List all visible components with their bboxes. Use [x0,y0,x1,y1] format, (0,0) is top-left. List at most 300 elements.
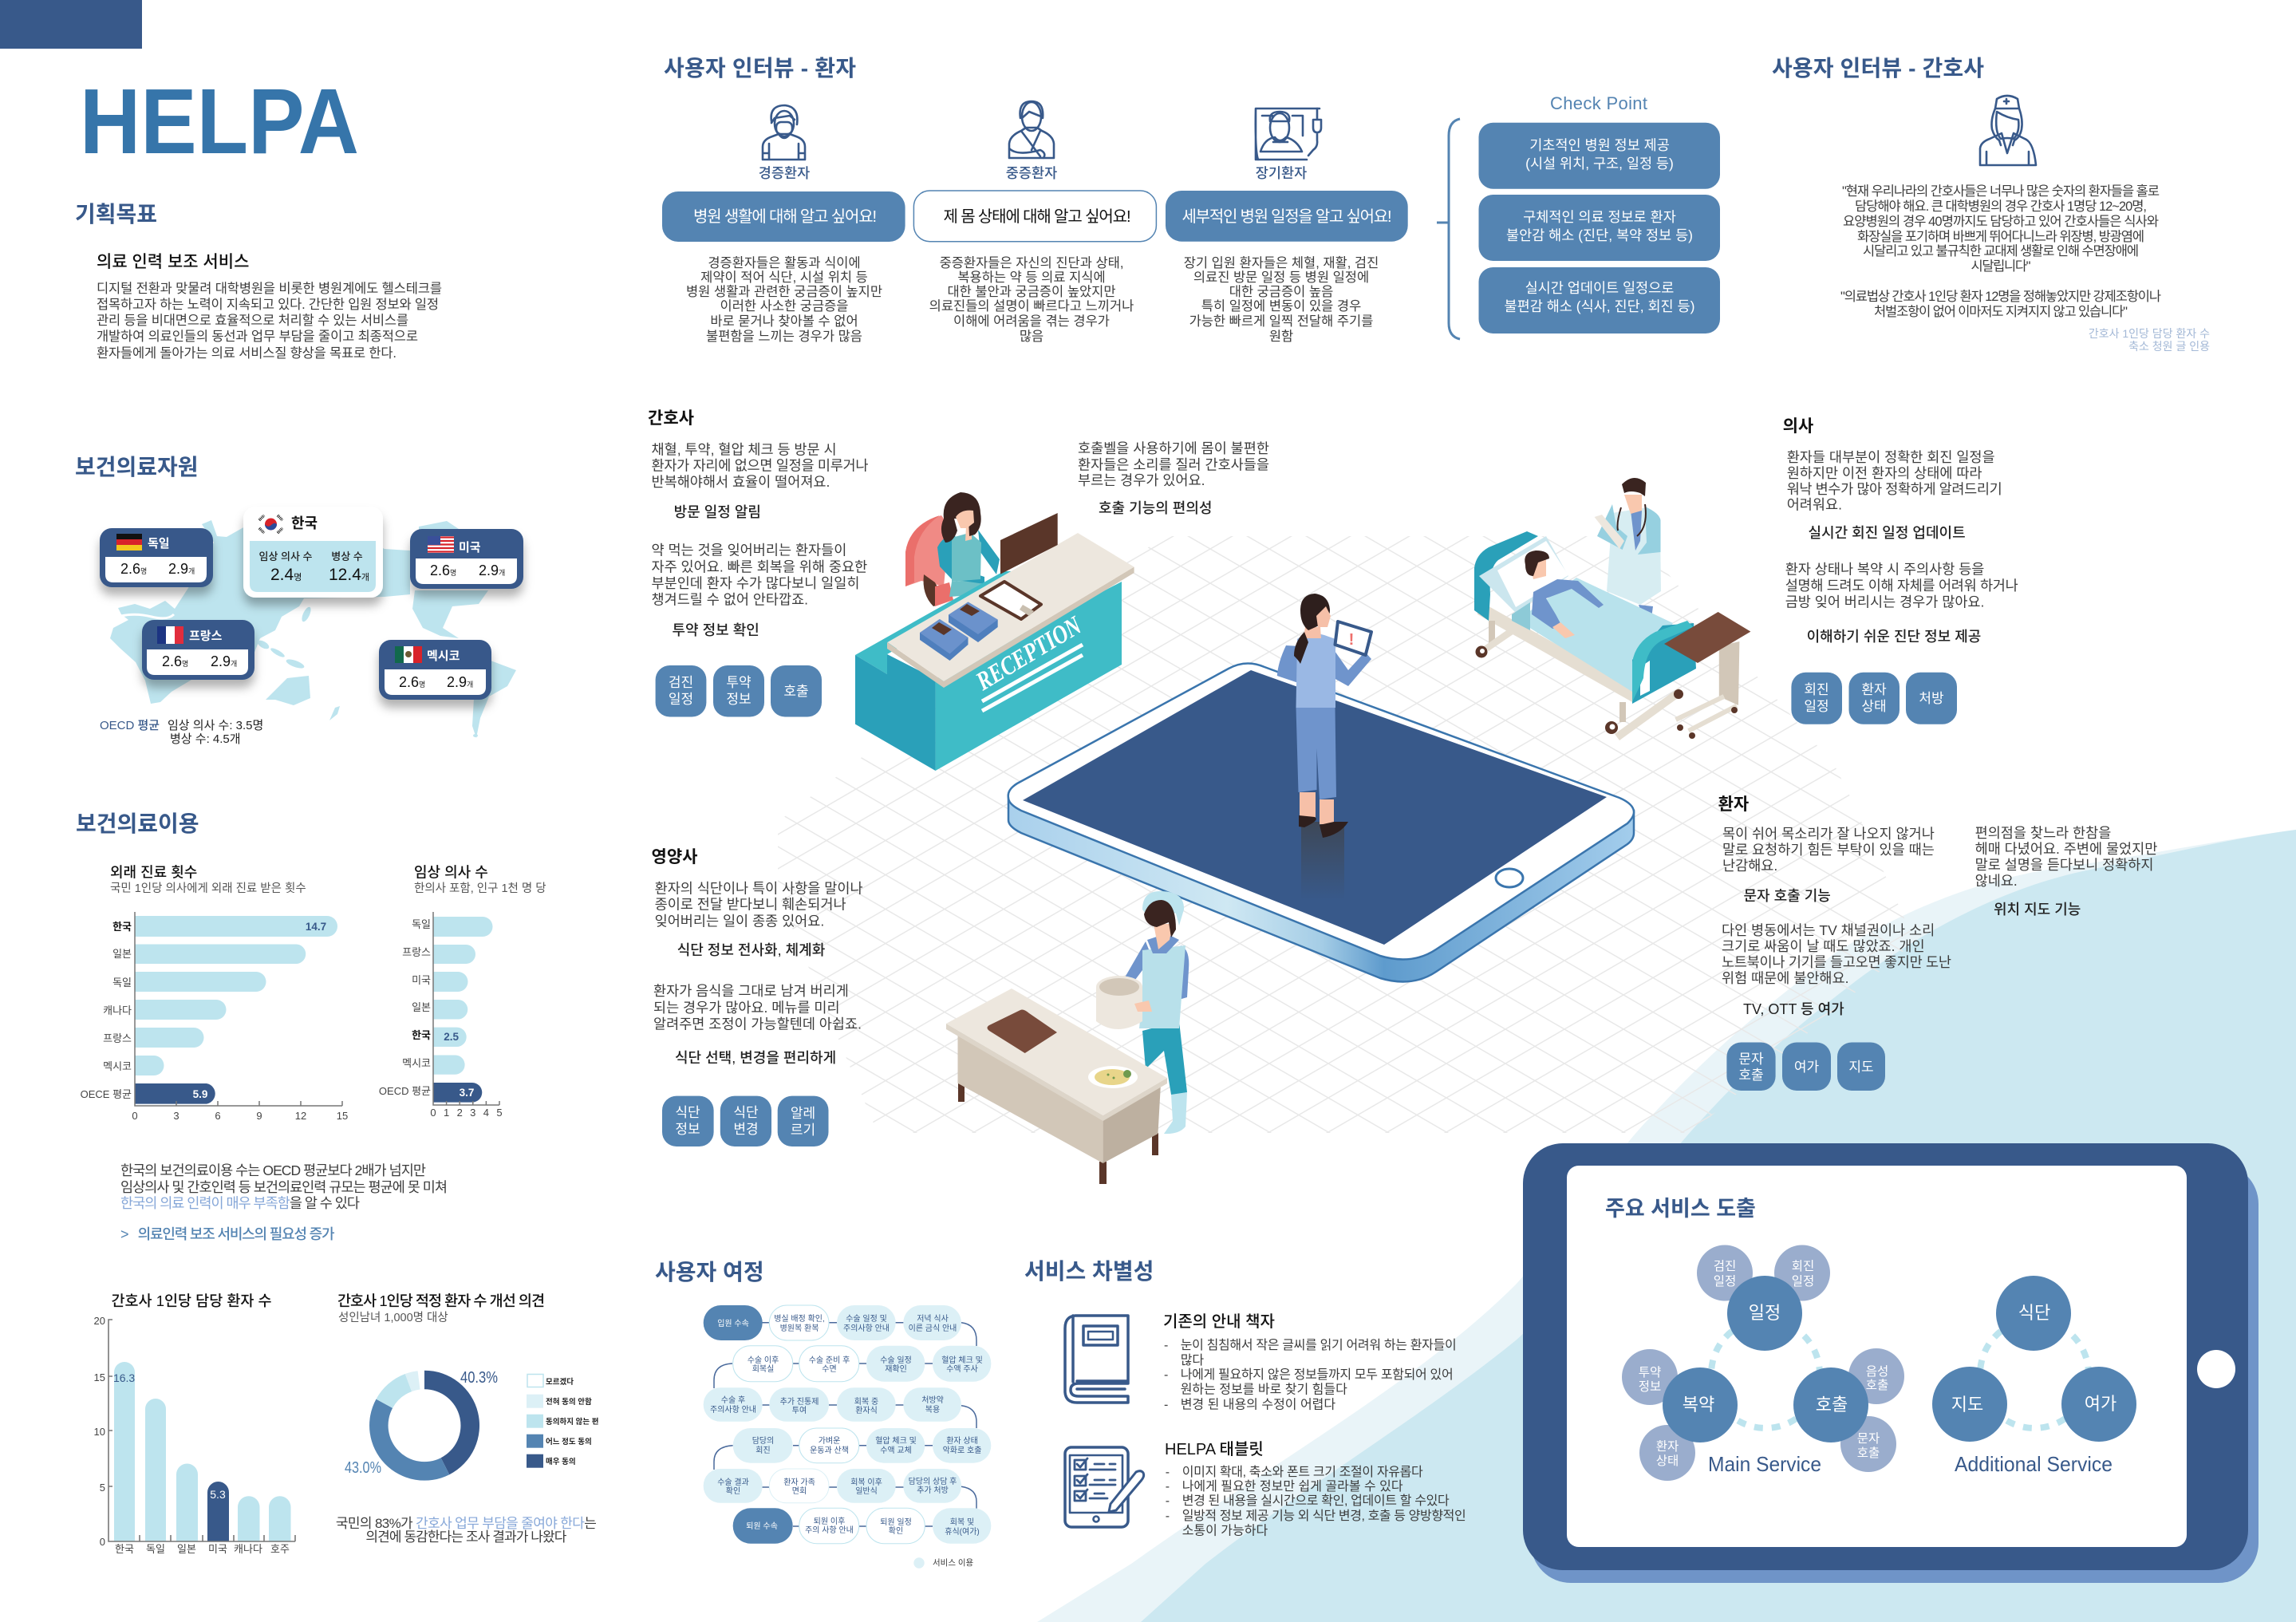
heading: nurse interview: 사용자 인터뷰 - 간호사 [1772,56,1984,81]
bar chart: outpatient visits: 15 [337,1110,348,1122]
text: severe patient: 대한 불안과 궁금증이 높았지만 [947,284,1116,299]
card: Germany: 2.9개 [168,561,195,577]
doctor [1607,507,1661,605]
bar chart: clinical doctors: 1 [444,1107,449,1119]
panel: healthcare utilisation [76,811,546,1242]
text: existing booklet: - [1164,1368,1168,1382]
doctor need 2: 금방 잊어 버리시는 경우가 많아요. [1785,594,1984,610]
patient need 2: 위험 때문에 불안해요. [1722,970,1849,986]
doctor need 1: 어려워요. [1787,496,1842,512]
dietitian need 2: 식단 선택, 변경을 편리하게 [675,1050,836,1066]
text: HELPA tablet: - [1166,1480,1170,1494]
top corner tab [0,0,142,49]
bar chart: patients per nurse: 15 [94,1371,105,1383]
bar chart: clinical doctors: 한의사 포함, 인구 1천 명 당 [414,882,546,895]
patient need 1 [1722,826,1935,904]
footboard [1632,623,1696,704]
nurse need 3 [1078,440,1269,516]
card: Germany: 독일 [148,537,170,551]
panel: user interview patient [662,56,1408,344]
donut chart: opinion on nurse patient ratio: 국민의 83%가 간호사 업무 부담을 줄여야 한다는 [336,1516,597,1531]
journey row 1: 병실 배정 확인, [774,1314,825,1324]
text: severe patient: 많음 [1020,329,1043,344]
table legs [958,1081,1158,1184]
bar chart: outpatient visits: 일본 [112,948,132,960]
bar chart: patients per nurse: 10 [94,1426,105,1438]
arms [1277,645,1300,683]
main service cluster: 호출 [1857,1446,1880,1460]
bar chart: patients per nurse: 0 [100,1536,105,1548]
bar chart: clinical doctors: 미국 [412,974,431,986]
books [949,602,998,642]
dietitian need 1: 종이로 전달 받다보니 훼손되거나 [655,897,846,913]
main service cluster: 검진 [1714,1259,1736,1273]
citation: 축소 청원 글 인용 [2128,340,2210,353]
journey row 4: 가벼운 [819,1436,840,1446]
journey row 4: 혈압 체크 및 [875,1435,917,1446]
journey row 2 [733,1346,991,1382]
journey legend [913,1557,974,1569]
desk sign: RECEPTION [971,611,1087,697]
text: severe patient: 복용하는 약 등 의료 지식에 [957,270,1106,285]
panel: check point [1437,93,1720,339]
illustration: dietitian with table [946,891,1189,1184]
journey row 5: 일반식 [855,1486,878,1496]
journey row 4: 회진 [755,1446,771,1455]
donut chart: opinion on nurse patient ratio: 어느 정도 동의 [546,1438,592,1446]
journey row 2: 재확인 [885,1364,907,1374]
journey row 5: 환자 가족 [783,1478,815,1487]
text: HELPA tablet [1165,1440,1466,1538]
button: hospital life [662,191,905,242]
journey row 6: 확인 [889,1526,903,1536]
button: my condition: 제 몸 상태에 대해 알고 싶어요! [943,207,1131,226]
journey row 3: 회복 중 [854,1397,878,1407]
journey row 2: 수술 이후 [748,1356,779,1365]
dietitian need 1: 환자의 식단이나 특이 사항을 말이나 [655,881,863,897]
main service cluster: 호출 [1866,1378,1888,1392]
bar chart: clinical doctors: 일본 [412,1001,431,1013]
doctor feature buttons: 회진 [1804,682,1829,697]
bar chart: clinical doctors: 프랑스 [402,946,431,958]
check box 3: 실시간 업데이트 일정으로 [1525,280,1674,296]
doctor need 1: 환자들 대부분이 정확한 회진 일정을 [1787,449,1995,465]
text: nurse quotes: 처벌조항이 없어 이마저도 지켜지지 않고 있습니다" [1874,304,2128,319]
main service cluster: 호출 [1816,1395,1848,1415]
donut chart: opinion on nurse patient ratio: 성인남녀 1,000명 대상 [338,1311,448,1324]
bed base [1477,600,1632,702]
panel: healthcare resources [75,455,523,746]
heading: healthcare resources: 보건의료자원 [75,455,199,479]
nurse need 2: 부분인데 환자 수가 많다보니 일일히 [651,575,859,591]
bar chart: patients per nurse [94,1292,295,1555]
text: long-term patient: 가능한 빠르게 일찍 전달해 주기를 [1189,314,1373,329]
bar chart: outpatient visits: 국민 1인당 의사에게 외래 진료 받은 횟수 [110,882,306,895]
text: long-term patient: 장기 입원 환자들은 체혈, 재활, 검진 [1184,255,1379,270]
text: existing booklet: - [1164,1339,1168,1352]
text block: finding: 한국의 의료 인력이 매우 부족함을 알 수 있다 [120,1195,360,1211]
dietitian need 1: 잊어버리는 일이 종종 있어요. [655,913,824,929]
journey row 5: 추가 처방 [917,1486,949,1495]
patient need 3: 헤매 다녔어요. 주변에 물었지만 [1975,841,2157,857]
heading: key services: 주요 서비스 도출 [1605,1197,1756,1221]
bar chart: clinical doctors [379,865,546,1119]
citation: 간호사 1인당 담당 환자 수 [2089,327,2210,340]
bar chart: outpatient visits: 14.7 [306,921,326,933]
desk sign [971,611,1087,711]
doctor feature buttons: 처방 [1919,691,1944,706]
paragraph: 개발하여 의료인들의 동선과 업무 부담을 줄이고 최종적으로 [97,329,418,344]
card: Korea: 임상 의사 수 [258,551,313,562]
bar chart: outpatient visits: 3 [173,1110,179,1122]
button: my condition [913,191,1156,242]
tablet home button [2197,1350,2235,1388]
journey row 6: 주의 사항 안내 [805,1525,854,1535]
label: severe patient: 중증환자 [1006,165,1057,181]
journey row 3 [704,1387,961,1422]
journey row 6: 휴식(여가) [945,1527,980,1537]
check box 1: (시설 위치, 구조, 일정 등) [1525,156,1674,172]
doctor feature buttons: 환자 [1861,682,1887,697]
bar chart: clinical doctors: 3.7 [460,1087,474,1099]
plate [1088,1066,1138,1088]
tablet screen [1567,1166,2187,1547]
dietitian need 2: 알려주면 조정이 가능할텐데 아쉽죠. [653,1016,862,1032]
bar chart: outpatient visits: 캐나다 [103,1004,132,1016]
icon: long-term patient [1256,109,1321,160]
journey row 3: 환자식 [855,1406,878,1415]
card: USA: 2.6명 [430,562,456,578]
doctor need 2 [1785,562,2018,645]
text block: finding: 한국의 보건의료이용 수는 OECD 평균보다 2배가 넘지만 [120,1162,426,1178]
doctor feature buttons: 일정 [1804,699,1829,714]
patient feature buttons [1726,1042,1885,1091]
nurse feature buttons: 정보 [726,692,752,707]
donut chart: opinion on nurse patient ratio: 모르겠다 [546,1377,574,1387]
patient need 3: 말로 설명을 듣다보니 정확하지 [1975,857,2153,873]
trousers [1296,708,1336,799]
journey row 2: 회복실 [752,1364,774,1374]
bar chart: outpatient visits: 프랑스 [103,1032,132,1044]
clipboard [980,582,1041,619]
journey row 3: 복용 [925,1405,940,1415]
nurse need 2: 약 먹는 것을 잊어버리는 환자들이 [651,543,846,558]
check box 1: 기초적인 병원 정보 제공 [1529,137,1670,153]
bar chart: clinical doctors: 한국 [412,1029,431,1041]
illustration: doctor and patient bed [1474,478,1750,740]
journey row 2: 수술 일정 [880,1356,912,1365]
patient feature buttons: 여가 [1794,1060,1819,1075]
additional service cluster [1932,1276,2136,1476]
OECD average note: 병상 수: 4.5개 [170,732,241,746]
nurse need 2 [651,543,867,638]
text: mild patient: 불편함을 느끼는 경우가 많음 [706,329,862,344]
bar chart: clinical doctors: 3 [470,1107,475,1119]
patient need 2: 노트북이나 기기를 들고오면 좋지만 도난 [1722,954,1951,970]
legs [1300,792,1334,824]
journey row 2: 수술 준비 후 [809,1356,850,1365]
journey row 4: 운동과 산책 [810,1446,849,1455]
check box 1 [1479,123,1720,189]
bar chart: patients per nurse: 5.3 [210,1488,226,1501]
dietitian feature buttons: 알레 [791,1106,815,1121]
bar chart: patients per nurse: 일본 [177,1543,196,1555]
text: long-term patient: 대한 궁금증이 높음 [1229,284,1333,299]
main service cluster: 문자 [1857,1431,1880,1446]
bar chart: clinical doctors: 0 [430,1107,436,1119]
patient feature buttons: 지도 [1848,1060,1874,1075]
journey row 1: 입원 수속 [717,1318,749,1328]
dietitian need 2: 환자가 음식을 그대로 남겨 버리게 [653,983,849,999]
bar chart: clinical doctors: 멕시코 [402,1057,431,1069]
nurse feature buttons: 투약 [726,675,752,690]
check box 3 [1479,267,1720,333]
panel: tablet with key services [1523,1143,2259,1583]
patient need 1: 말로 요청하기 힘든 부탁이 있을 때는 [1722,842,1935,858]
bar chart: patients per nurse: 캐나다 [234,1543,262,1555]
patient need 3: 위치 지도 기능 [1994,902,2081,918]
journey row 3: 투여 [792,1406,807,1415]
journey row 4: 수액 교체 [880,1446,912,1455]
role heading: patient: 환자 [1718,795,1749,814]
role heading: nurse: 간호사 [648,409,694,428]
text block: finding: 임상의사 및 간호인력 등 보건의료인력 규모는 평균에 못 미쳐 [120,1179,448,1195]
journey row 6: 회복 및 [950,1517,974,1527]
bar chart: patients per nurse: 미국 [208,1543,227,1555]
text: existing booklet: 눈이 침침해서 작은 글씨를 읽기 어려워 하는 환자들이 [1181,1338,1457,1352]
card: Korea: 병상 수 [331,551,363,562]
button: detailed schedule: 세부적인 병원 일정을 알고 싶어요! [1182,207,1391,226]
donut chart: opinion on nurse patient ratio: 40.3% [460,1369,498,1387]
journey row 6: 퇴원 일정 [880,1517,912,1527]
journey row 6 [733,1508,991,1544]
journey row 3: 추가 진통제 [780,1397,819,1407]
donut chart: opinion on nurse patient ratio [336,1292,598,1545]
card: Mexico: 2.6명 [399,674,425,690]
pot [1096,987,1142,1029]
doctor need 1 [1787,449,2002,541]
reflection [1301,822,1344,900]
illustration: central tablet [1008,663,1634,981]
OECD average note: 임상 의사 수: 3.5명 [168,719,263,732]
text: long-term patient: 의료진 방문 일정 등 병원 일정에 [1193,270,1369,285]
desk teal faces [855,571,1037,674]
journey row 5: 회복 이후 [850,1478,882,1487]
text: HELPA tablet: 이미지 확대, 축소와 폰트 크기 조절이 자유롭다 [1182,1465,1423,1479]
nurse feature buttons: 일정 [669,692,693,707]
illustration: nurse with tablet: ! [1349,631,1354,649]
illustration: reception desk with nurse [855,492,1134,771]
person [1164,1092,1187,1134]
doctor need 2: 이해하기 쉬운 진단 정보 제공 [1807,629,1981,645]
dietitian feature buttons: 정보 [675,1122,700,1137]
tablet frame [1523,1143,2248,1570]
main service cluster: 투약 [1639,1365,1661,1379]
paragraph [97,281,442,361]
nurse need 1: 환자가 자리에 없으면 일정을 미루거나 [651,458,868,474]
journey row 5: 수술 결과 [717,1478,749,1487]
text: HELPA tablet: 나에게 필요한 정보만 쉽게 골라볼 수 있다 [1182,1479,1403,1494]
text: HELPA tablet: - [1166,1494,1170,1508]
journey row 6: 퇴원 이후 [814,1517,845,1526]
text: HELPA tablet: 변경 된 내용을 실시간으로 확인, 업데이트 할 수있다 [1182,1494,1450,1508]
journey row 1: 주의사항 안내 [843,1324,890,1333]
patient [1532,579,1604,629]
patient need 3: 않네요. [1975,873,2018,889]
doctor need 1: 워낙 변수가 많아 정확하게 알려드리기 [1787,481,2002,497]
text: long-term patient: 원함 [1269,329,1293,344]
subheading: 의료 인력 보조 서비스 [97,253,249,271]
nurse need 3: 호출벨을 사용하기에 몸이 불편한 [1078,440,1269,456]
nurse need 1: 채혈, 투약, 혈압 체크 등 방문 시 [651,442,837,458]
paragraph: 디지털 전환과 맞물려 대학병원을 비롯한 병원계에도 헬스테크를 [97,281,442,296]
tablet frame shadow [1531,1164,2259,1583]
text: severe patient: 의료진들의 설명이 빠르다고 느끼거나 [929,298,1134,314]
additional service cluster: 식단 [2018,1303,2050,1323]
panel: service differentiation [1024,1259,1466,1538]
panel: nurse needs [648,409,1269,716]
card: Korea [243,507,383,598]
main service cluster: 음성 [1866,1364,1888,1379]
text block: finding: 의료인력 보조 서비스의 필요성 증가 [138,1226,335,1242]
additional service cluster: 지도 [1951,1395,1983,1415]
card: USA: 미국 [459,541,481,554]
bar chart: patients per nurse: 호주 [270,1543,290,1555]
card: Germany [100,528,213,587]
icon: nurse [1980,96,2036,165]
background waves [1037,830,2296,1622]
journey connectors [714,1323,976,1526]
text: nurse quotes: 요양병원의 경우 40명까지도 담당하고 있어 간호사들은 식사와 [1843,214,2159,229]
bar chart: outpatient visits: 12 [295,1110,306,1122]
label: mild patient: 경증환자 [759,165,810,181]
bar chart: patients per nurse: 16.3 [113,1371,135,1384]
additional service cluster: Additional Service [1955,1452,2113,1476]
donut chart: opinion on nurse patient ratio: 전혀 동의 안함 [546,1397,592,1407]
doctor need 2: 환자 상태나 복약 시 주의사항 등을 [1785,562,1984,578]
illustration: isometric floor grid [778,536,1915,1133]
bar chart: outpatient visits: 한국 [112,921,132,933]
title: HELPA [80,69,359,173]
text block: finding: > [120,1226,129,1242]
heading: check point: Check Point [1550,93,1647,113]
button: detailed schedule [1166,191,1408,242]
text: long-term patient [1184,255,1379,344]
over-bed table [1719,641,1739,705]
dietitian feature buttons: 변경 [733,1122,759,1137]
panel: user interview nurse [1772,56,2210,353]
main service cluster: 회진 [1792,1259,1814,1273]
text: severe patient: 이해에 어려움을 겪는 경우가 [953,314,1110,329]
text: nurse quotes: 화장실을 포기하며 바쁘게 뛰어다니느라 위장병, 방광염에 [1857,229,2144,244]
panel: planning goal [75,202,442,361]
citation [2089,327,2210,353]
patient need 2: 다인 병동에서는 TV 채널권이나 소리 [1722,922,1935,938]
text: existing booklet: 변경 된 내용의 수정이 어렵다 [1181,1398,1335,1412]
bar chart: outpatient visits: 5.9 [193,1088,207,1100]
bar chart: patients per nurse: 간호사 1인당 담당 환자 수 [112,1292,272,1309]
panel: dietitian needs [651,848,863,1146]
patient feature buttons: 문자 [1738,1052,1764,1067]
OECD average note: OECD 평균 [100,719,160,732]
journey row 4 [733,1428,991,1463]
donut chart: opinion on nurse patient ratio: 의견에 동감한다는 조사 결과가 나왔다 [365,1529,567,1545]
nurse feature buttons: 호출 [783,684,809,699]
main service cluster: 일정 [1714,1274,1736,1289]
bar chart: patients per nurse: 독일 [146,1543,165,1555]
label: long-term patient: 장기환자 [1256,165,1307,181]
bar chart: clinical doctors: 4 [483,1107,489,1119]
text: nurse quotes: 시달립니다" [1971,258,2031,274]
text: nurse quotes [1840,184,2161,319]
check box 2 [1479,195,1720,261]
text: existing booklet: 원하는 정보를 바로 찾기 힘들다 [1181,1382,1347,1396]
doctor need 2: 설명해 드려도 이해 자체를 어려워 하거나 [1785,578,2018,594]
journey row 5: 면회 [792,1486,807,1496]
heading: differentiation: 서비스 차별성 [1024,1259,1154,1284]
main service cluster: 복약 [1683,1395,1714,1415]
text: existing booklet: - [1164,1398,1168,1412]
patient need 1: 문자 호출 기능 [1744,888,1831,904]
nurse need 2: 챙겨드릴 수 없어 안타깝죠. [651,592,808,608]
dietitian feature buttons: 식단 [733,1105,759,1120]
journey row 5: 확인 [726,1486,740,1496]
text: nurse quotes: "의료법상 간호사 1인당 환자 12명을 정해놓았지만 강제조항이나 [1840,289,2161,304]
text: nurse quotes: 시달리고 있고 불규칙한 교대제 생활로 인해 수면장애에 [1863,243,2139,258]
text: mild patient: 이러한 사소한 궁금증을 [720,298,848,314]
blanket [1516,578,1673,692]
text: existing booklet [1163,1312,1457,1412]
main service cluster [1622,1245,1904,1481]
patient need 2: TV, OTT 등 여가 [1743,1001,1844,1017]
role heading: dietitian: 영양사 [651,848,697,866]
world map [110,519,516,738]
donut chart: opinion on nurse patient ratio: 43.0% [345,1459,381,1477]
text: mild patient: 병원 생활과 관련한 궁금증이 높지만 [686,284,882,299]
text: HELPA tablet: - [1166,1466,1170,1479]
journey row 5: 담당의 상담 후 [909,1477,957,1486]
journey row 1: 이른 금식 안내 [909,1324,957,1333]
counter top [887,566,1134,688]
journey row 3: 처방약 [921,1395,944,1405]
card: USA [410,529,523,589]
bar chart: outpatient visits: 0 [132,1110,138,1122]
bar chart: outpatient visits: 6 [215,1110,221,1122]
role heading: doctor: 의사 [1783,417,1813,436]
text: mild patient [686,255,882,344]
journey row 1: 저녁 식사 [917,1314,949,1324]
text: existing booklet: 많다 [1181,1353,1204,1367]
dietitian need 1 [655,881,863,958]
text: mild patient: 경증환자들은 활동과 식이에 [708,255,861,270]
card: Korea: 한국 [291,515,318,531]
panel: nurse workload [94,1292,598,1555]
journey row 3: 수술 후 [721,1395,745,1405]
OECD average note [100,719,263,746]
journey row 6: 퇴원 수속 [746,1521,778,1531]
text: HELPA tablet: - [1166,1510,1170,1523]
check box 2: 구체적인 의료 정보로 환자 [1523,209,1676,225]
card: Germany: 2.6명 [120,561,147,577]
text: existing booklet: 기존의 안내 책자 [1163,1312,1275,1331]
nurse feature buttons [656,665,822,716]
nurse need 2: 자주 있어요. 빠른 회복을 위해 중요한 [651,558,867,574]
bar chart: clinical doctors: 독일 [412,918,431,930]
main service cluster: Main Service [1708,1452,1821,1476]
dietitian need 1: 식단 정보 전사화, 체계화 [677,942,826,958]
dietitian need 2 [653,983,862,1066]
card: France: 프랑스 [189,629,223,643]
